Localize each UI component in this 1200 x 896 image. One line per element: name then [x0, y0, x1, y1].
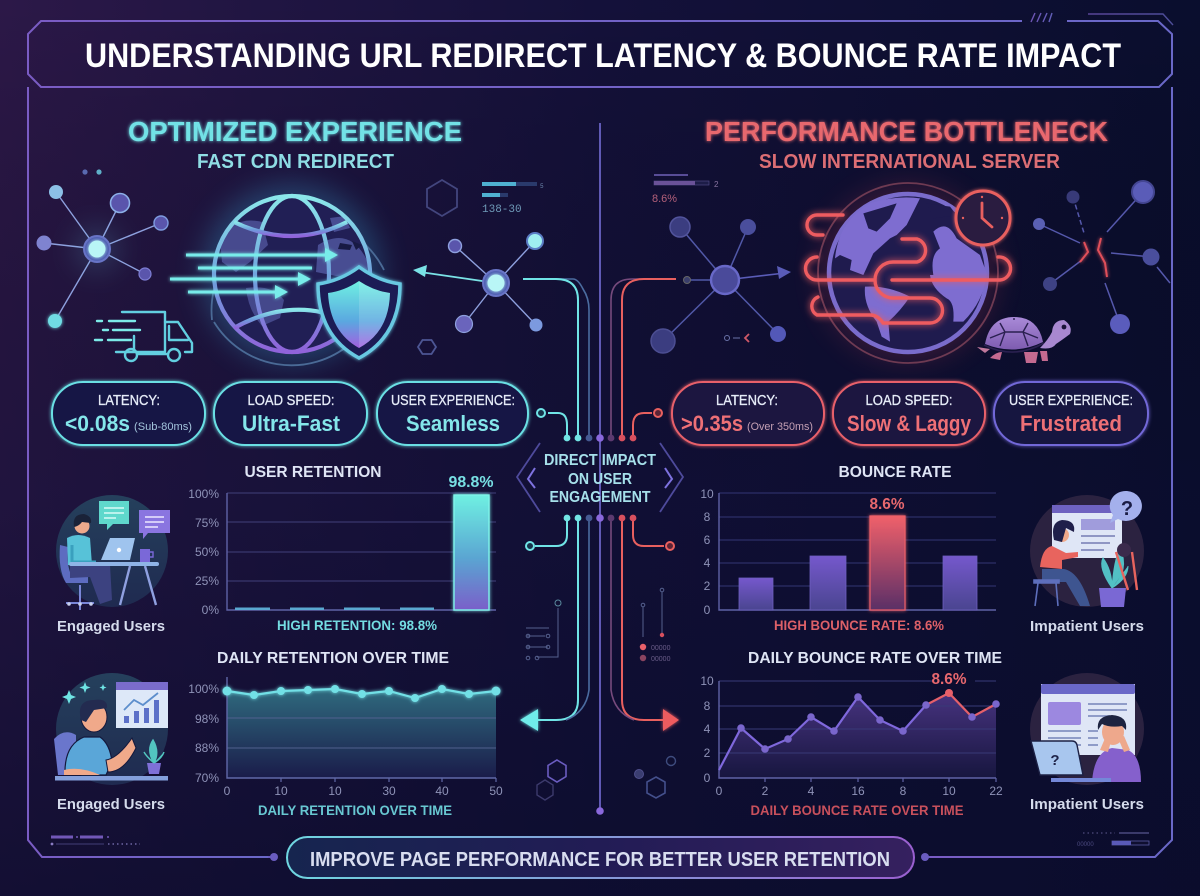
icon: shield — [318, 267, 400, 358]
chart: daily retention: 88% — [195, 741, 219, 755]
decorative data readout: 5 — [540, 183, 544, 190]
label: impatient users 2: Impatient Users — [1030, 796, 1144, 813]
chart title: DAILY RETENTION OVER TIME — [217, 650, 449, 667]
panel: performance bottleneck — [651, 116, 1170, 818]
connector wires: cyan — [523, 279, 589, 720]
chart: daily bounce rate: 2 — [704, 746, 711, 760]
chart title: BOUNCE RATE — [838, 464, 952, 481]
chart: daily bounce rate: 8 — [900, 784, 907, 798]
chart: daily bounce rate — [700, 650, 1003, 818]
icon: right network — [413, 233, 543, 332]
chart: daily retention — [188, 650, 503, 818]
icon: broken network — [1033, 181, 1170, 334]
label: engaged users: Engaged Users — [57, 618, 165, 635]
illustration: engaged user at desk — [56, 495, 170, 610]
chart caption: DAILY BOUNCE RATE OVER TIME — [750, 802, 964, 818]
connector wires: red — [611, 279, 676, 720]
center divider — [599, 123, 601, 811]
chart: bounce rate: 8 — [704, 510, 711, 524]
chart: daily retention: 0 — [224, 784, 231, 798]
decorative small circuit right: 00000 — [651, 656, 671, 663]
chart title: DAILY BOUNCE RATE OVER TIME — [748, 650, 1002, 667]
pill: load speed: LOAD SPEED: — [248, 393, 334, 409]
chart: bounce rate: 6 — [704, 533, 711, 547]
heading: optimized experience: OPTIMIZED EXPERIENCE — [128, 116, 462, 147]
icon: clock — [956, 191, 1010, 245]
chart: daily bounce rate: 0 — [704, 771, 711, 785]
chart: daily retention: 70% — [195, 771, 219, 785]
pill: user experience — [377, 382, 528, 445]
decorative tick marks bottom right: 00000 — [1077, 842, 1094, 848]
label: impatient users: Impatient Users — [1030, 618, 1144, 635]
pill: latency: <0.08s — [65, 411, 130, 436]
icon: turtle — [977, 317, 1071, 363]
chart: bounce rate: 8.6% — [870, 496, 904, 513]
chart: bounce rate: 0 — [704, 603, 711, 617]
pill: latency: >0.35s — [681, 411, 743, 436]
metric pills: bottleneck — [672, 382, 1148, 445]
chart: bounce rate — [700, 464, 996, 633]
center callout text — [544, 452, 656, 506]
pill: latency — [52, 382, 205, 445]
chart: bounce rate: 4 — [704, 556, 711, 570]
chart: bounce rate: 10 — [700, 487, 714, 501]
chart: daily retention: 10 — [274, 784, 288, 798]
pill: user experience: USER EXPERIENCE: — [1009, 393, 1133, 409]
pill: user experience — [994, 382, 1148, 445]
icon: left network — [36, 169, 168, 328]
decorative tick marks bottom right — [1077, 833, 1149, 848]
decorative readout — [652, 174, 749, 342]
chart: daily bounce rate: 8 — [704, 699, 711, 713]
chart: daily bounce rate: 0 — [716, 784, 723, 798]
icon: globe with shield — [170, 184, 400, 365]
chart: daily bounce rate: 22 — [989, 784, 1003, 798]
pill: latency: (Over 350ms) — [747, 421, 813, 433]
chart: user retention: 98.8% — [448, 474, 494, 491]
decorative tick marks bottom left — [51, 836, 140, 845]
heading: performance bottleneck: PERFORMANCE BOTTLENECK — [705, 116, 1108, 147]
pill: load speed: Slow & Laggy — [847, 411, 972, 436]
center callout text: ENGAGEMENT — [550, 489, 651, 506]
decorative data readout — [418, 180, 544, 354]
label: engaged users 2: Engaged Users — [57, 796, 165, 813]
chart: user retention: 100% — [188, 487, 219, 501]
chart: daily retention: 98% — [195, 712, 219, 726]
pill: latency: (Sub-80ms) — [134, 421, 192, 433]
pill: latency: LATENCY: — [98, 393, 160, 409]
subheading: fast cdn redirect: FAST CDN REDIRECT — [197, 151, 394, 173]
chart: bounce rate: 2 — [704, 579, 711, 593]
pill: load speed: Ultra-Fast — [242, 411, 341, 436]
illustration: impatient user two: ? — [1050, 752, 1060, 769]
bar: 8.6% — [870, 516, 905, 610]
chart caption: DAILY RETENTION OVER TIME — [258, 802, 452, 818]
chart: daily bounce rate: 16 — [851, 784, 865, 798]
chart caption: HIGH BOUNCE RATE: 8.6% — [774, 617, 945, 633]
chart: user retention: 0% — [202, 603, 219, 617]
chart: daily retention: 50 — [489, 784, 503, 798]
panel: optimized experience — [36, 116, 544, 818]
chevrons — [517, 443, 683, 512]
center callout text: DIRECT IMPACT — [544, 452, 656, 469]
center callout text: ON USER — [568, 471, 632, 488]
icon: left network dim — [651, 217, 791, 353]
decorative data readout: 138-30 — [482, 204, 522, 216]
pill: load speed: LOAD SPEED: — [866, 393, 952, 409]
decorative small circuit right: 00000 — [651, 645, 671, 652]
pill: load speed — [833, 382, 985, 445]
decorative readout: 2 — [714, 180, 719, 189]
pill: user experience: Seamless — [406, 411, 500, 436]
line series — [222, 685, 500, 702]
pill: latency — [672, 382, 824, 445]
chart: user retention — [188, 464, 496, 633]
footer callout — [268, 837, 930, 878]
arrow: cyan return — [520, 709, 538, 731]
illustration: engaged user with chart — [54, 673, 168, 785]
line series — [719, 689, 1000, 770]
icon: delivery truck — [95, 312, 192, 361]
chart: daily bounce rate: 4 — [808, 784, 815, 798]
decorative small circuit left — [526, 600, 566, 800]
pill: latency: LATENCY: — [716, 393, 778, 409]
illustration: impatient user one: ? — [1121, 498, 1133, 520]
decorative readout: 8.6% — [652, 193, 677, 205]
chart: user retention: 50% — [195, 545, 219, 559]
chart: daily bounce rate: 2 — [762, 784, 769, 798]
pill: user experience: Frustrated — [1020, 411, 1122, 436]
speed arrows — [170, 248, 338, 299]
chart: daily bounce rate: 4 — [704, 722, 711, 736]
chart caption: HIGH RETENTION: 98.8% — [277, 617, 438, 633]
chart: user retention: 75% — [195, 516, 219, 530]
pill: user experience: USER EXPERIENCE: — [391, 393, 515, 409]
arrow: red forward — [663, 709, 679, 731]
illustration: impatient user one — [1030, 491, 1144, 607]
chart: daily bounce rate: 10 — [942, 784, 956, 798]
subheading: slow international server: SLOW INTERNATIONAL SERVER — [759, 151, 1061, 173]
chart: daily bounce rate: 10 — [700, 674, 714, 688]
decorative small circuit right — [634, 588, 676, 798]
pill: load speed — [214, 382, 367, 445]
chart: daily retention: 100% — [188, 682, 219, 696]
illustration: impatient user two — [1030, 673, 1144, 785]
chart title: USER RETENTION — [244, 464, 382, 481]
footer callout: IMPROVE PAGE PERFORMANCE FOR BETTER USER RETENTION — [310, 849, 890, 871]
chart: daily retention: 10 — [328, 784, 342, 798]
panel: direct impact connectors — [517, 279, 683, 815]
chart: daily bounce rate: 8.6% — [932, 671, 966, 688]
continents — [835, 197, 987, 342]
connector end nodes — [526, 409, 674, 815]
icon: globe with tangled red route — [806, 183, 1011, 363]
chart: user retention: 25% — [195, 574, 219, 588]
red squiggle route — [806, 215, 1011, 323]
metric pills: optimized — [52, 382, 528, 445]
chart: daily retention: 40 — [435, 784, 449, 798]
chart: daily retention: 30 — [382, 784, 396, 798]
bar: 98.8% — [454, 495, 489, 610]
